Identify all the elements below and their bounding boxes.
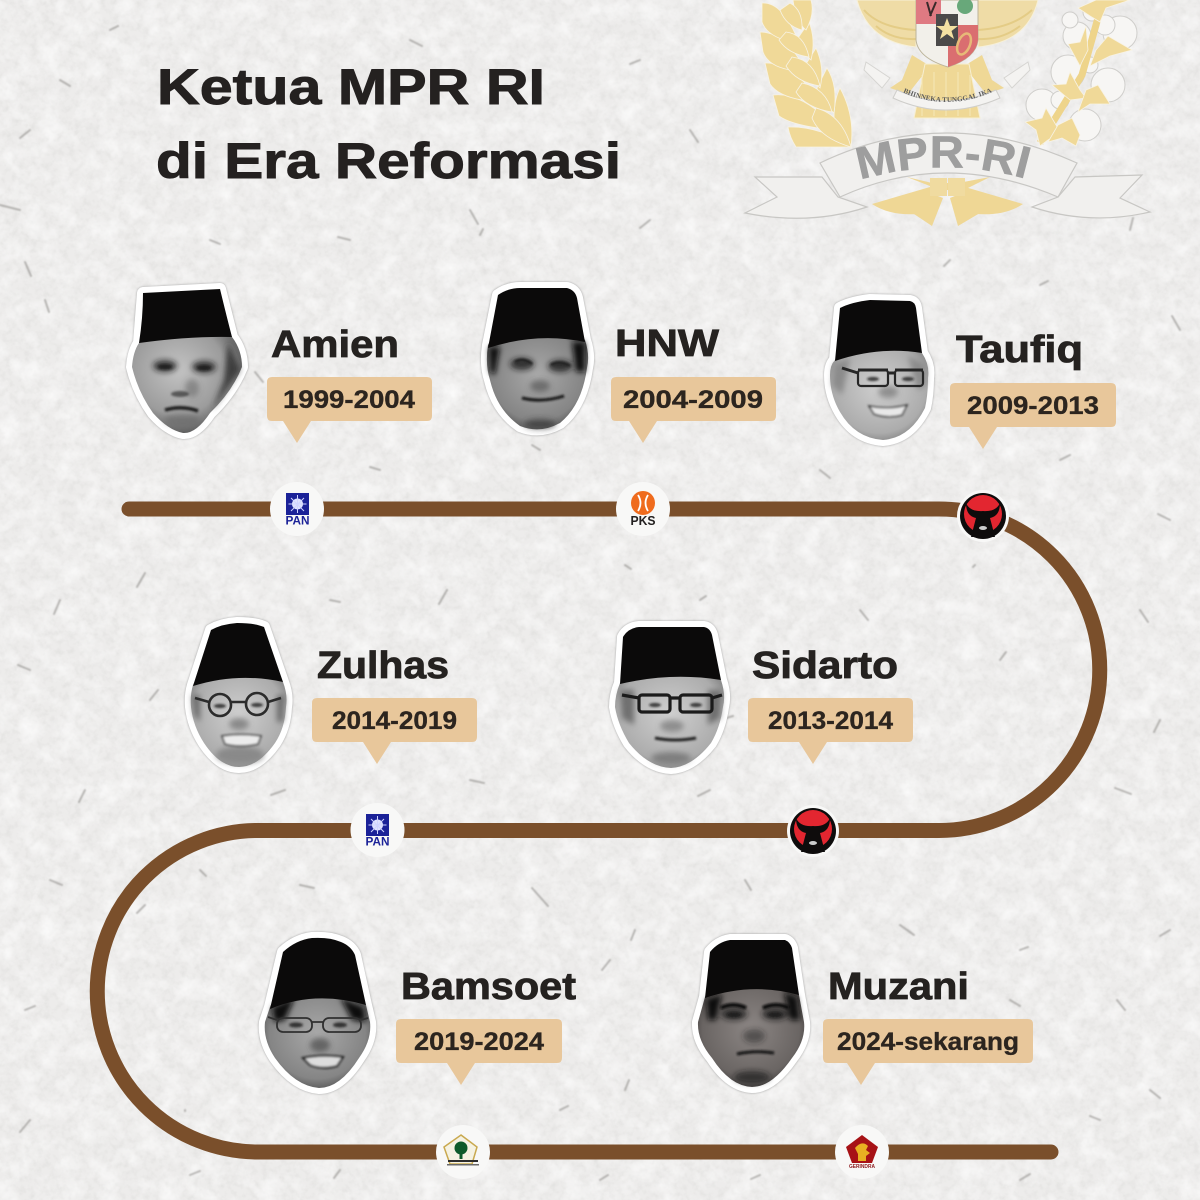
portrait: Taufiq: [830, 300, 928, 440]
title: Ketua MPR RI: [157, 59, 545, 115]
period callout: 2009-2013: 2009-2013: [967, 392, 1099, 420]
emblem: Garuda MPR-RI watermark: [744, 0, 1152, 226]
name: Sidarto: Sidarto: [752, 645, 898, 687]
name: Taufiq: Taufiq: [956, 329, 1083, 371]
garuda shield: [916, 0, 978, 67]
period callout: 2014-2019: 2014-2019: [332, 707, 457, 735]
party logo: PAN (Zulhas): [350, 803, 404, 857]
period callout: 2004-2009: [611, 377, 776, 443]
party logo: PKS (HNW): PKS: [630, 514, 656, 528]
portrait: Sidarto: [615, 627, 724, 768]
entry: Amien 1999-2004: [132, 289, 432, 443]
portrait: HNW: [487, 288, 588, 429]
garuda wings: [857, 0, 1038, 118]
party logo: PAN (Amien): [270, 482, 324, 536]
entry: Zulhas 2014-2019: [191, 623, 477, 767]
name: Amien: Amien: [271, 324, 399, 366]
period callout: 1999-2004: [267, 377, 432, 443]
period callout: 2004-2009: 2004-2009: [623, 386, 763, 414]
ribbon and bow: MPR-RI: [856, 136, 1031, 179]
party logo: PKS (HNW): [616, 482, 670, 536]
period callout: 2019-2024: 2019-2024: [414, 1028, 544, 1056]
entry: HNW 2004-2009: [487, 288, 776, 443]
portrait: Muzani: [698, 940, 804, 1087]
entry: Taufiq 2009-2013: [830, 300, 1116, 449]
entry: Bamsoet 2019-2024: [265, 938, 576, 1088]
period callout: 2019-2024: [396, 1019, 562, 1085]
portrait: Bamsoet: [265, 938, 370, 1088]
name: Bamsoet: Bamsoet: [401, 966, 576, 1008]
name: Muzani: Muzani: [828, 966, 969, 1008]
wheat stalk: [760, 0, 852, 147]
period callout: 2013-2014: 2013-2014: [768, 707, 893, 735]
portrait: Amien: [132, 289, 242, 433]
party logo: PAN (Zulhas): PAN: [366, 836, 390, 848]
party logo: Golkar (Bamsoet): [436, 1125, 490, 1179]
portrait: Zulhas: [191, 623, 287, 767]
period callout: 2024-sekarang: [823, 1019, 1033, 1085]
entry: Sidarto 2013-2014: [615, 627, 913, 768]
motto ribbon: [892, 88, 1000, 110]
period callout: 2014-2019: [312, 698, 477, 764]
party logo: Gerindra (Muzani): [835, 1125, 889, 1179]
period callout: 2009-2013: [950, 383, 1116, 449]
title: di Era Reformasi: [156, 133, 621, 189]
ribbon and bow: [744, 132, 1152, 226]
entry: Muzani 2024-sekarang: [698, 940, 1033, 1087]
party logo: PDI-P (Sidarto): [787, 805, 839, 857]
period callout: 1999-2004: 1999-2004: [283, 386, 415, 414]
name: Zulhas: Zulhas: [317, 645, 449, 687]
cotton branch: [1025, 0, 1137, 146]
timeline path: [97, 509, 1100, 1152]
motto ribbon: BHINNEKA TUNGGAL IKA: [903, 88, 992, 102]
name: HNW: HNW: [615, 323, 719, 365]
party logo: PDI-P (Taufiq): [957, 490, 1009, 542]
period callout: 2024-sekarang: 2024-sekarang: [837, 1028, 1019, 1056]
period callout: 2013-2014: [748, 698, 913, 764]
party logo: PAN (Amien): PAN: [286, 516, 310, 528]
party logo: Gerindra (Muzani): GERINDRA: [849, 1164, 875, 1170]
title: [156, 59, 621, 189]
